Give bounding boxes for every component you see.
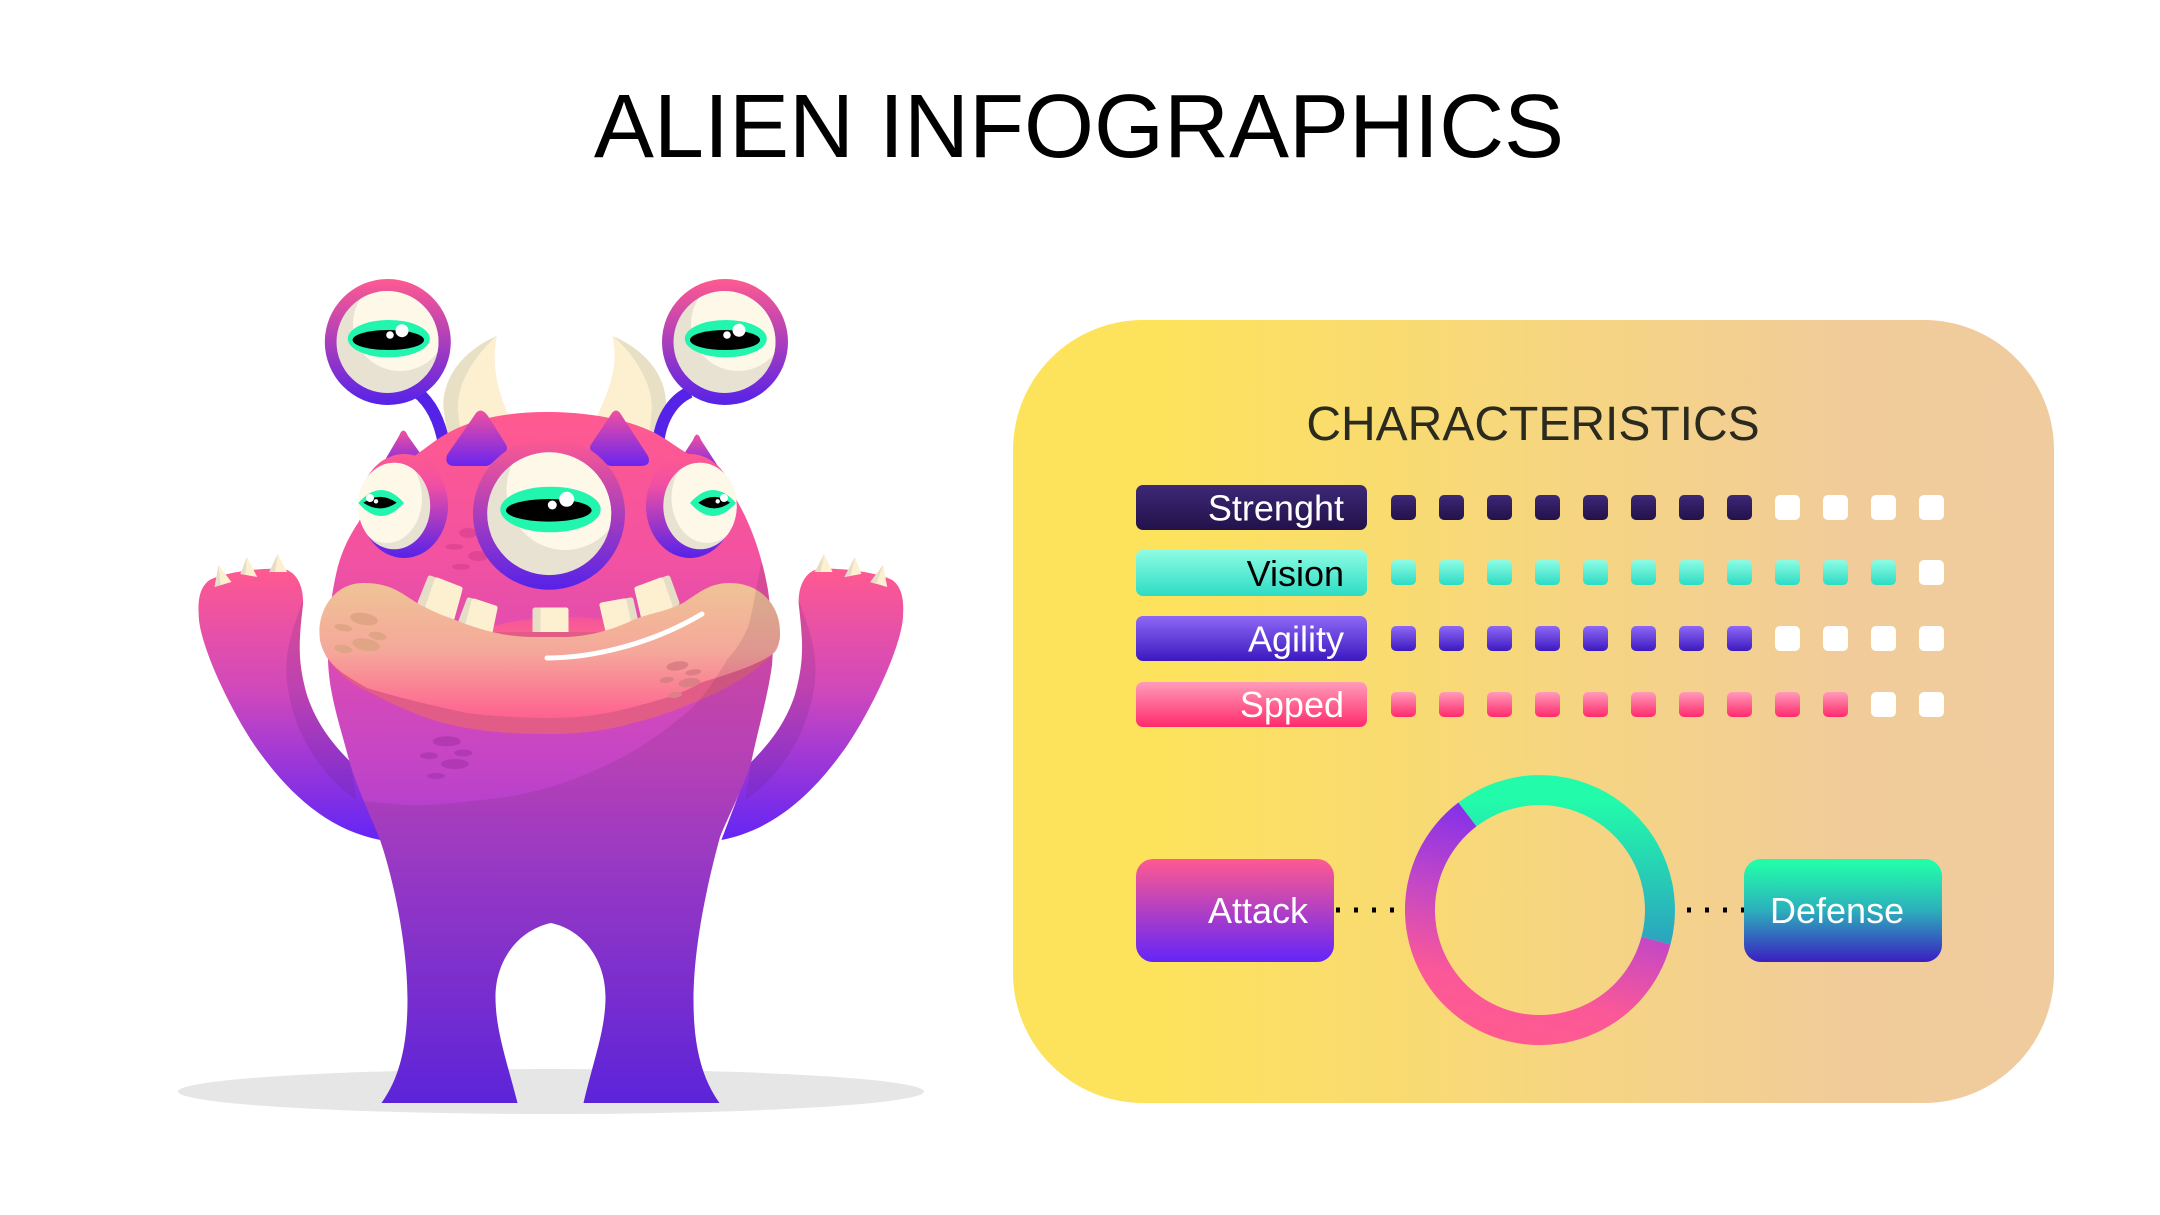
ground shadow xyxy=(178,1069,924,1114)
left arm xyxy=(198,554,380,840)
defense connector dots xyxy=(1687,908,1745,912)
defense box: Defense xyxy=(1770,890,1904,931)
outer right spike xyxy=(680,434,723,474)
left claws xyxy=(215,554,287,587)
donut chart: attack vs defense xyxy=(1405,775,1675,1045)
teeth xyxy=(420,578,677,640)
lip freckles left xyxy=(334,611,387,655)
body xyxy=(328,412,773,1103)
right side eye xyxy=(646,453,742,558)
belly freckles xyxy=(420,736,472,779)
strength rating dots xyxy=(1391,495,1944,520)
left horn xyxy=(443,336,510,440)
attack box xyxy=(1136,859,1334,962)
inner right spike xyxy=(590,410,649,466)
top right eye xyxy=(662,277,788,405)
right arm xyxy=(721,554,903,840)
lip freckles right xyxy=(659,660,702,699)
illustration: alien monster xyxy=(178,277,924,1114)
mouth lip xyxy=(319,583,780,734)
title: ALIEN INFOGRAPHICS xyxy=(594,77,1564,177)
center eye xyxy=(473,448,625,590)
row: agility xyxy=(1136,616,1944,661)
speed label xyxy=(1136,682,1367,727)
attack box: Attack xyxy=(1208,890,1309,931)
panel heading: CHARACTERISTICS xyxy=(1306,398,1760,451)
outer left spike xyxy=(378,430,425,472)
panel background xyxy=(1013,320,2054,1103)
inner left spike xyxy=(446,410,507,466)
defense box xyxy=(1744,859,1942,962)
inner mouth xyxy=(490,617,605,642)
right horn xyxy=(596,336,666,440)
vision label xyxy=(1136,550,1367,596)
defense ring segment xyxy=(1458,775,1675,944)
panel: characteristics xyxy=(1013,320,2054,1103)
speed rating dots xyxy=(1391,692,1944,717)
left side eye xyxy=(352,453,448,558)
strength label xyxy=(1136,485,1367,530)
face freckles xyxy=(445,528,488,570)
vision rating dots xyxy=(1391,560,1944,585)
row: strength xyxy=(1136,485,1944,530)
left eye stalk xyxy=(417,392,444,445)
attack connector dots xyxy=(1336,908,1394,912)
attack ring segment xyxy=(1405,802,1670,1045)
strength label: Strenght xyxy=(1208,488,1344,529)
right eye stalk xyxy=(658,392,690,445)
row: vision xyxy=(1136,550,1944,596)
agility label: Agility xyxy=(1248,619,1344,660)
body shadow overlay xyxy=(350,555,790,1110)
vision label: Vision xyxy=(1247,553,1344,594)
top left eye xyxy=(325,277,451,405)
right claws xyxy=(815,554,887,587)
mouth highlight xyxy=(547,614,702,658)
speed label: Spped xyxy=(1240,684,1344,725)
agility label xyxy=(1136,616,1367,661)
agility rating dots xyxy=(1391,626,1944,651)
row: speed xyxy=(1136,682,1944,727)
